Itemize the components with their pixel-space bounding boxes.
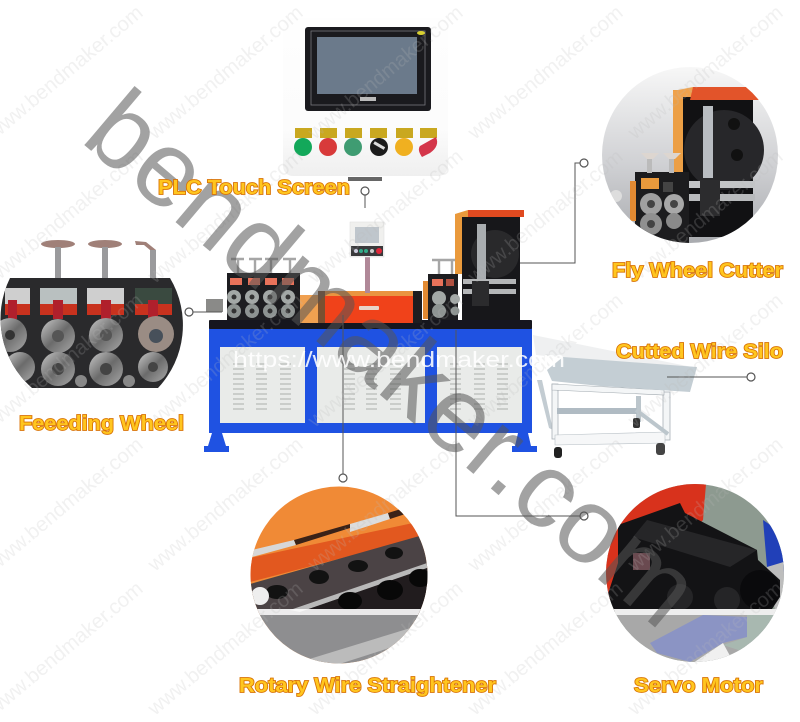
small diagonal watermarks: www.bendmaker.com [623, 289, 787, 432]
small diagonal watermarks: www.bendmaker.com [463, 433, 627, 576]
panel: rotary wire straightener close-up [250, 486, 431, 667]
label: Rotary Wire Straightener: Rotary Wire Straightener [239, 674, 496, 697]
panel: feeding wheel close-up [0, 240, 185, 390]
louvre door centre [317, 347, 425, 423]
panel: PLC touch screen close-up [283, 18, 448, 181]
callout: feeding wheel leader [185, 308, 222, 316]
small diagonal watermarks: www.bendmaker.com [143, 289, 307, 432]
touch screen display [305, 27, 431, 111]
control buttons [294, 128, 437, 157]
small diagonal watermarks: www.bendmaker.com [463, 577, 627, 720]
small diagonal watermarks: www.bendmaker.com [303, 289, 467, 432]
callout: silo leader [667, 373, 755, 381]
website URL overlay: https://www.bendmaker.com [233, 347, 565, 372]
label: PLC Touch Screen: PLC Touch Screen [158, 176, 350, 199]
large diagonal watermark: bendmaker.com [64, 66, 723, 649]
callout: servo motor leader [456, 330, 588, 520]
small diagonal watermarks: www.bendmaker.com [303, 433, 467, 576]
control panel on post [350, 222, 384, 293]
fly wheel cutter cabinet [455, 210, 524, 320]
louvre door left [220, 347, 305, 423]
small diagonal watermarks: www.bendmaker.com [623, 1, 787, 144]
small diagonal watermarks: www.bendmaker.com [143, 577, 307, 720]
feeding wheel unit [206, 259, 300, 320]
small diagonal watermarks: www.bendmaker.com [143, 1, 307, 144]
label: Cutted Wire Silo: Cutted Wire Silo [616, 340, 783, 363]
panel: cutted wire silo [533, 335, 697, 458]
small diagonal watermarks: www.bendmaker.com [303, 577, 467, 720]
callout: rotary straightener leader [339, 315, 347, 482]
panel: wire machine body [204, 210, 537, 452]
small diagonal watermarks: www.bendmaker.com [463, 1, 627, 144]
label: Feeeding Wheel: Feeeding Wheel [19, 412, 184, 435]
louvre door right [437, 347, 522, 423]
panel: fly wheel cutter close-up [602, 67, 778, 244]
silo tray [533, 335, 697, 392]
small diagonal watermarks: www.bendmaker.com [623, 433, 787, 576]
rotary straightener housing [300, 291, 422, 323]
panel: servo motor close-up [600, 484, 790, 665]
small diagonal watermarks: www.bendmaker.com [463, 145, 627, 288]
handwheels [41, 240, 156, 281]
small diagonal watermarks: www.bendmaker.com [623, 577, 787, 720]
silo table frame [537, 380, 670, 445]
blue base frame [204, 320, 537, 452]
small diagonal watermarks: www.bendmaker.com [303, 1, 467, 144]
silo wheels [554, 418, 665, 458]
cutter roller unit [423, 260, 460, 320]
callout: fly wheel cutter leader [520, 159, 588, 263]
small diagonal watermarks: www.bendmaker.com [143, 145, 307, 288]
callout: PLC touch screen leader [361, 187, 369, 208]
small diagonal watermarks: www.bendmaker.com [143, 433, 307, 576]
label: Fly Wheel Cutter: Fly Wheel Cutter [612, 259, 783, 282]
small diagonal watermarks: www.bendmaker.com [623, 145, 787, 288]
small diagonal watermarks: www.bendmaker.com [463, 289, 627, 432]
label: Servo Motor: Servo Motor [634, 674, 763, 697]
small diagonal watermarks: www.bendmaker.com [303, 145, 467, 288]
